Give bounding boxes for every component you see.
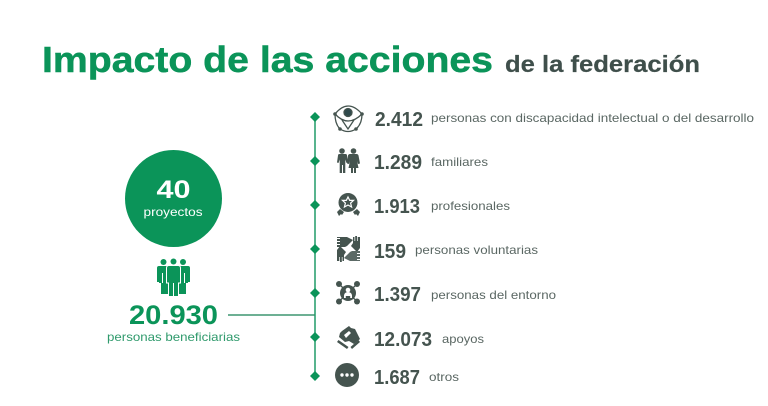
- row: family members: familiares: [431, 155, 488, 169]
- row: supports: apoyos: [442, 332, 484, 346]
- projects circle: [125, 150, 222, 247]
- row: others: otros: [429, 370, 459, 384]
- row: professionals: 1.913: [374, 196, 420, 218]
- total beneficiaries: 20.930: [129, 300, 218, 330]
- icon: person in network: [336, 281, 360, 304]
- row: family members: [337, 148, 488, 174]
- projects circle: 40: [156, 176, 190, 204]
- row: persons with intellectual disability: personas con discapacidad intelectual o del desarrollo: [431, 111, 754, 125]
- total beneficiaries: [107, 300, 240, 344]
- row: family members: 1.289: [374, 152, 422, 174]
- row: supports: [337, 326, 484, 351]
- icon: medal: [337, 193, 360, 216]
- row: persons with intellectual disability: 2.412: [375, 109, 423, 131]
- connector line: [228, 314, 315, 316]
- row: volunteers: [337, 236, 538, 263]
- projects circle: proyectos: [144, 207, 203, 219]
- total beneficiaries: personas beneficiarias: [107, 330, 240, 344]
- row: professionals: [337, 193, 510, 218]
- row: people in the environment: 1.397: [374, 284, 421, 306]
- title: [42, 39, 700, 80]
- timeline spine with markers: [310, 112, 320, 381]
- row: people in the environment: personas del entorno: [431, 288, 556, 302]
- row: professionals: profesionales: [431, 199, 510, 213]
- icon: ellipsis circle: [335, 363, 359, 387]
- icon: joined hands: [337, 236, 360, 262]
- row: volunteers: 159: [374, 241, 406, 263]
- icon: group of people: [157, 258, 190, 296]
- title: de la federación: [505, 51, 700, 77]
- row: persons with intellectual disability: [333, 106, 754, 132]
- row: others: [335, 363, 459, 389]
- row: volunteers: personas voluntarias: [415, 243, 538, 257]
- row: supports: 12.073: [374, 329, 432, 351]
- title: Impacto de las acciones: [42, 39, 493, 80]
- icon: accessible eye: [333, 106, 364, 132]
- icon: couple: [337, 148, 360, 173]
- row: people in the environment: [336, 281, 556, 306]
- icon: fist: [337, 326, 360, 349]
- row: others: 1.687: [374, 367, 420, 389]
